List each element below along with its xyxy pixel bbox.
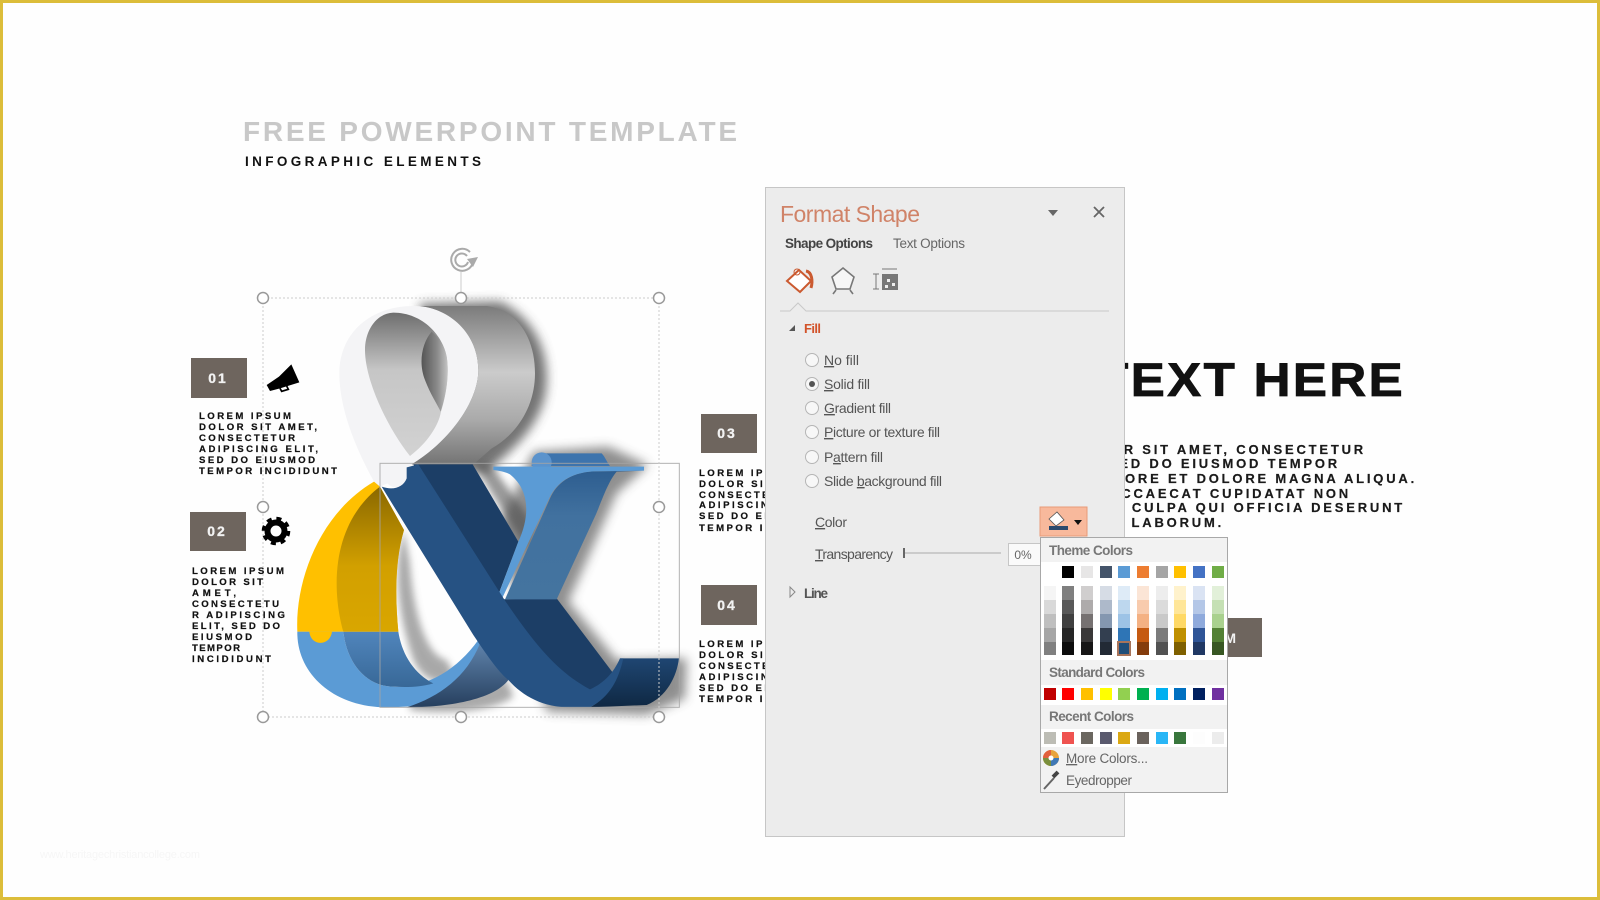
top loop: gray side xyxy=(412,306,535,464)
button behind dropdown: LOREM xyxy=(1185,630,1236,646)
top loop: inner gray xyxy=(365,313,448,456)
text 01: TEMPOR INCIDIDUNT xyxy=(199,466,337,477)
button behind dropdown xyxy=(1180,618,1262,657)
icon: gear xyxy=(264,518,288,544)
paragraph: ADIPISCING ELIT, SED DO EIUSMOD TEMPOR xyxy=(947,456,1340,471)
label: standard colors: Standard Colors xyxy=(1049,665,1145,680)
icon: color wheel xyxy=(1043,750,1059,766)
title: FREE POWERPOINT TEMPLATE xyxy=(243,116,737,147)
text 01: LOREM IPSUM xyxy=(199,411,291,422)
radio labels: Slide background fill xyxy=(824,473,942,489)
section: fill: Fill xyxy=(804,321,821,336)
arm: top ledge xyxy=(532,453,610,466)
subtitle: INFOGRAPHIC ELEMENTS xyxy=(245,154,481,169)
text 01: CONSECTETUR xyxy=(199,433,295,444)
selection box: inner xyxy=(380,463,679,707)
text 03 xyxy=(699,468,837,534)
radio labels: No fill xyxy=(824,352,859,368)
standard colour row xyxy=(1044,688,1224,700)
badge 03 xyxy=(701,414,757,453)
text 02 xyxy=(192,566,285,665)
panel: format shape xyxy=(766,188,1124,836)
radio selected dot xyxy=(809,381,815,387)
text 04: TEMPOR INCIDIDUNT xyxy=(699,694,837,705)
top loop: white face xyxy=(339,306,478,487)
selection frame and handles xyxy=(258,249,664,722)
badge 01: 01 xyxy=(208,370,228,386)
radio labels: Gradient fill xyxy=(824,400,891,416)
section: line xyxy=(790,586,828,601)
section: fill xyxy=(789,321,821,336)
badge 01 xyxy=(191,358,247,398)
badge 02 xyxy=(190,512,246,551)
color label: Color xyxy=(815,514,847,530)
panel menu caret xyxy=(1048,210,1058,216)
diagonal: dark back band xyxy=(413,464,613,692)
text 02: EIUSMOD xyxy=(192,632,252,643)
arm: bump xyxy=(532,452,552,472)
text 01: DOLOR SIT AMET, xyxy=(199,422,317,433)
paragraph: LOREM IPSUM DOLOR SIT AMET, CONSECTETUR xyxy=(946,442,1366,457)
heading: text here: TEXT HERE xyxy=(1097,353,1405,406)
text 01: SED DO EIUSMOD xyxy=(199,455,315,466)
text 02: R ADIPISCING xyxy=(192,610,285,621)
lower bowl: yellow bump xyxy=(309,632,332,643)
text 04 xyxy=(699,639,837,705)
lower bowl: dark yellow xyxy=(337,487,404,632)
badge 04 xyxy=(701,585,757,625)
radio labels: Pattern fill xyxy=(824,449,883,465)
text 03: ADIPISCING ELIT, xyxy=(699,500,818,511)
text 04: LOREM IPSUM xyxy=(699,639,791,650)
icon: size and position xyxy=(873,269,898,290)
text 04: CONSECTETUR xyxy=(699,661,795,672)
radio options xyxy=(806,354,818,488)
paragraph: MOLLIT ANIM ID EST LABORUM. xyxy=(944,515,1224,530)
paragraph xyxy=(944,442,1417,530)
transparency slider xyxy=(903,548,1001,558)
lower bowl: side xyxy=(407,643,508,707)
transparency value xyxy=(1008,544,1040,566)
label: recent colors: Recent Colors xyxy=(1049,709,1134,724)
text 04: SED DO EIUSMOD xyxy=(699,683,815,694)
tab: text options: Text Options xyxy=(893,236,965,251)
transparency value: 0% xyxy=(1014,548,1032,562)
section: line: Line xyxy=(804,586,828,601)
paragraph: PROIDENT, SUNT IN CULPA QUI OFFICIA DESERUNT xyxy=(953,500,1405,515)
text 03: CONSECTETUR xyxy=(699,490,795,501)
text 02: ELIT, SED DO xyxy=(192,621,281,632)
text 01 xyxy=(199,411,337,477)
paragraph: INCIDIDUNT UT LABORE ET DOLORE MAGNA ALIQUA. xyxy=(951,471,1417,486)
text 02: LOREM IPSUM xyxy=(192,566,284,577)
text 04: ADIPISCING ELIT, xyxy=(699,672,818,683)
text 04: DOLOR SIT AMET, xyxy=(699,650,817,661)
swatch background bands xyxy=(1041,562,1227,747)
lower bowl: inner blue xyxy=(343,632,433,687)
text 02: TEMPOR xyxy=(192,643,240,654)
top loop: counter xyxy=(422,332,448,412)
radio labels xyxy=(824,352,942,489)
icon: pentagon xyxy=(832,268,854,294)
text 02: AMET, xyxy=(192,588,236,599)
text 03: LOREM IPSUM xyxy=(699,468,791,479)
color dropdown xyxy=(1040,538,1228,792)
arm: medium face xyxy=(505,471,644,599)
tail: dark end xyxy=(590,658,679,707)
color button xyxy=(1040,507,1087,536)
text 01: ADIPISCING ELIT, xyxy=(199,444,318,455)
ampersand artwork xyxy=(297,302,687,715)
icon: megaphone xyxy=(267,364,299,391)
text 02: INCIDIDUNT xyxy=(192,654,271,665)
menu: eyedropper: Eyedropper xyxy=(1066,773,1132,788)
icon: eyedropper xyxy=(1044,772,1058,789)
watermark: www.heritagechristiancollege.com xyxy=(39,849,200,861)
transparency label: Transparency xyxy=(815,546,893,562)
close icon xyxy=(1094,207,1104,217)
lower bowl: light blue xyxy=(297,632,508,707)
icon: fill bucket xyxy=(787,269,812,292)
menu: more colors: More Colors... xyxy=(1066,751,1148,766)
radio labels: Solid fill xyxy=(824,376,870,392)
label: theme colors: Theme Colors xyxy=(1049,543,1133,558)
theme tints grid xyxy=(1044,586,1224,655)
recent colour row xyxy=(1044,732,1224,744)
text 03: SED DO EIUSMOD xyxy=(699,511,815,522)
badge 04: 04 xyxy=(717,597,737,613)
arm: light face xyxy=(493,467,644,599)
divider with notch xyxy=(780,303,1109,311)
text 03: TEMPOR INCIDIDUNT xyxy=(699,523,837,534)
lower bowl: yellow xyxy=(297,482,404,632)
badge 03: 03 xyxy=(717,425,737,441)
text 02: DOLOR SIT xyxy=(192,577,263,588)
text 02: CONSECTETU xyxy=(192,599,279,610)
badge 02: 02 xyxy=(207,523,227,539)
paragraph: EXCEPTEUR SINT OCCAECAT CUPIDATAT NON xyxy=(950,486,1351,501)
tab: shape options: Shape Options xyxy=(785,236,873,251)
theme colour row xyxy=(1044,566,1224,578)
text 03: DOLOR SIT AMET, xyxy=(699,479,817,490)
radio labels: Picture or texture fill xyxy=(824,424,940,440)
panel title: Format Shape xyxy=(780,201,920,227)
diagonal: front band xyxy=(382,464,623,707)
